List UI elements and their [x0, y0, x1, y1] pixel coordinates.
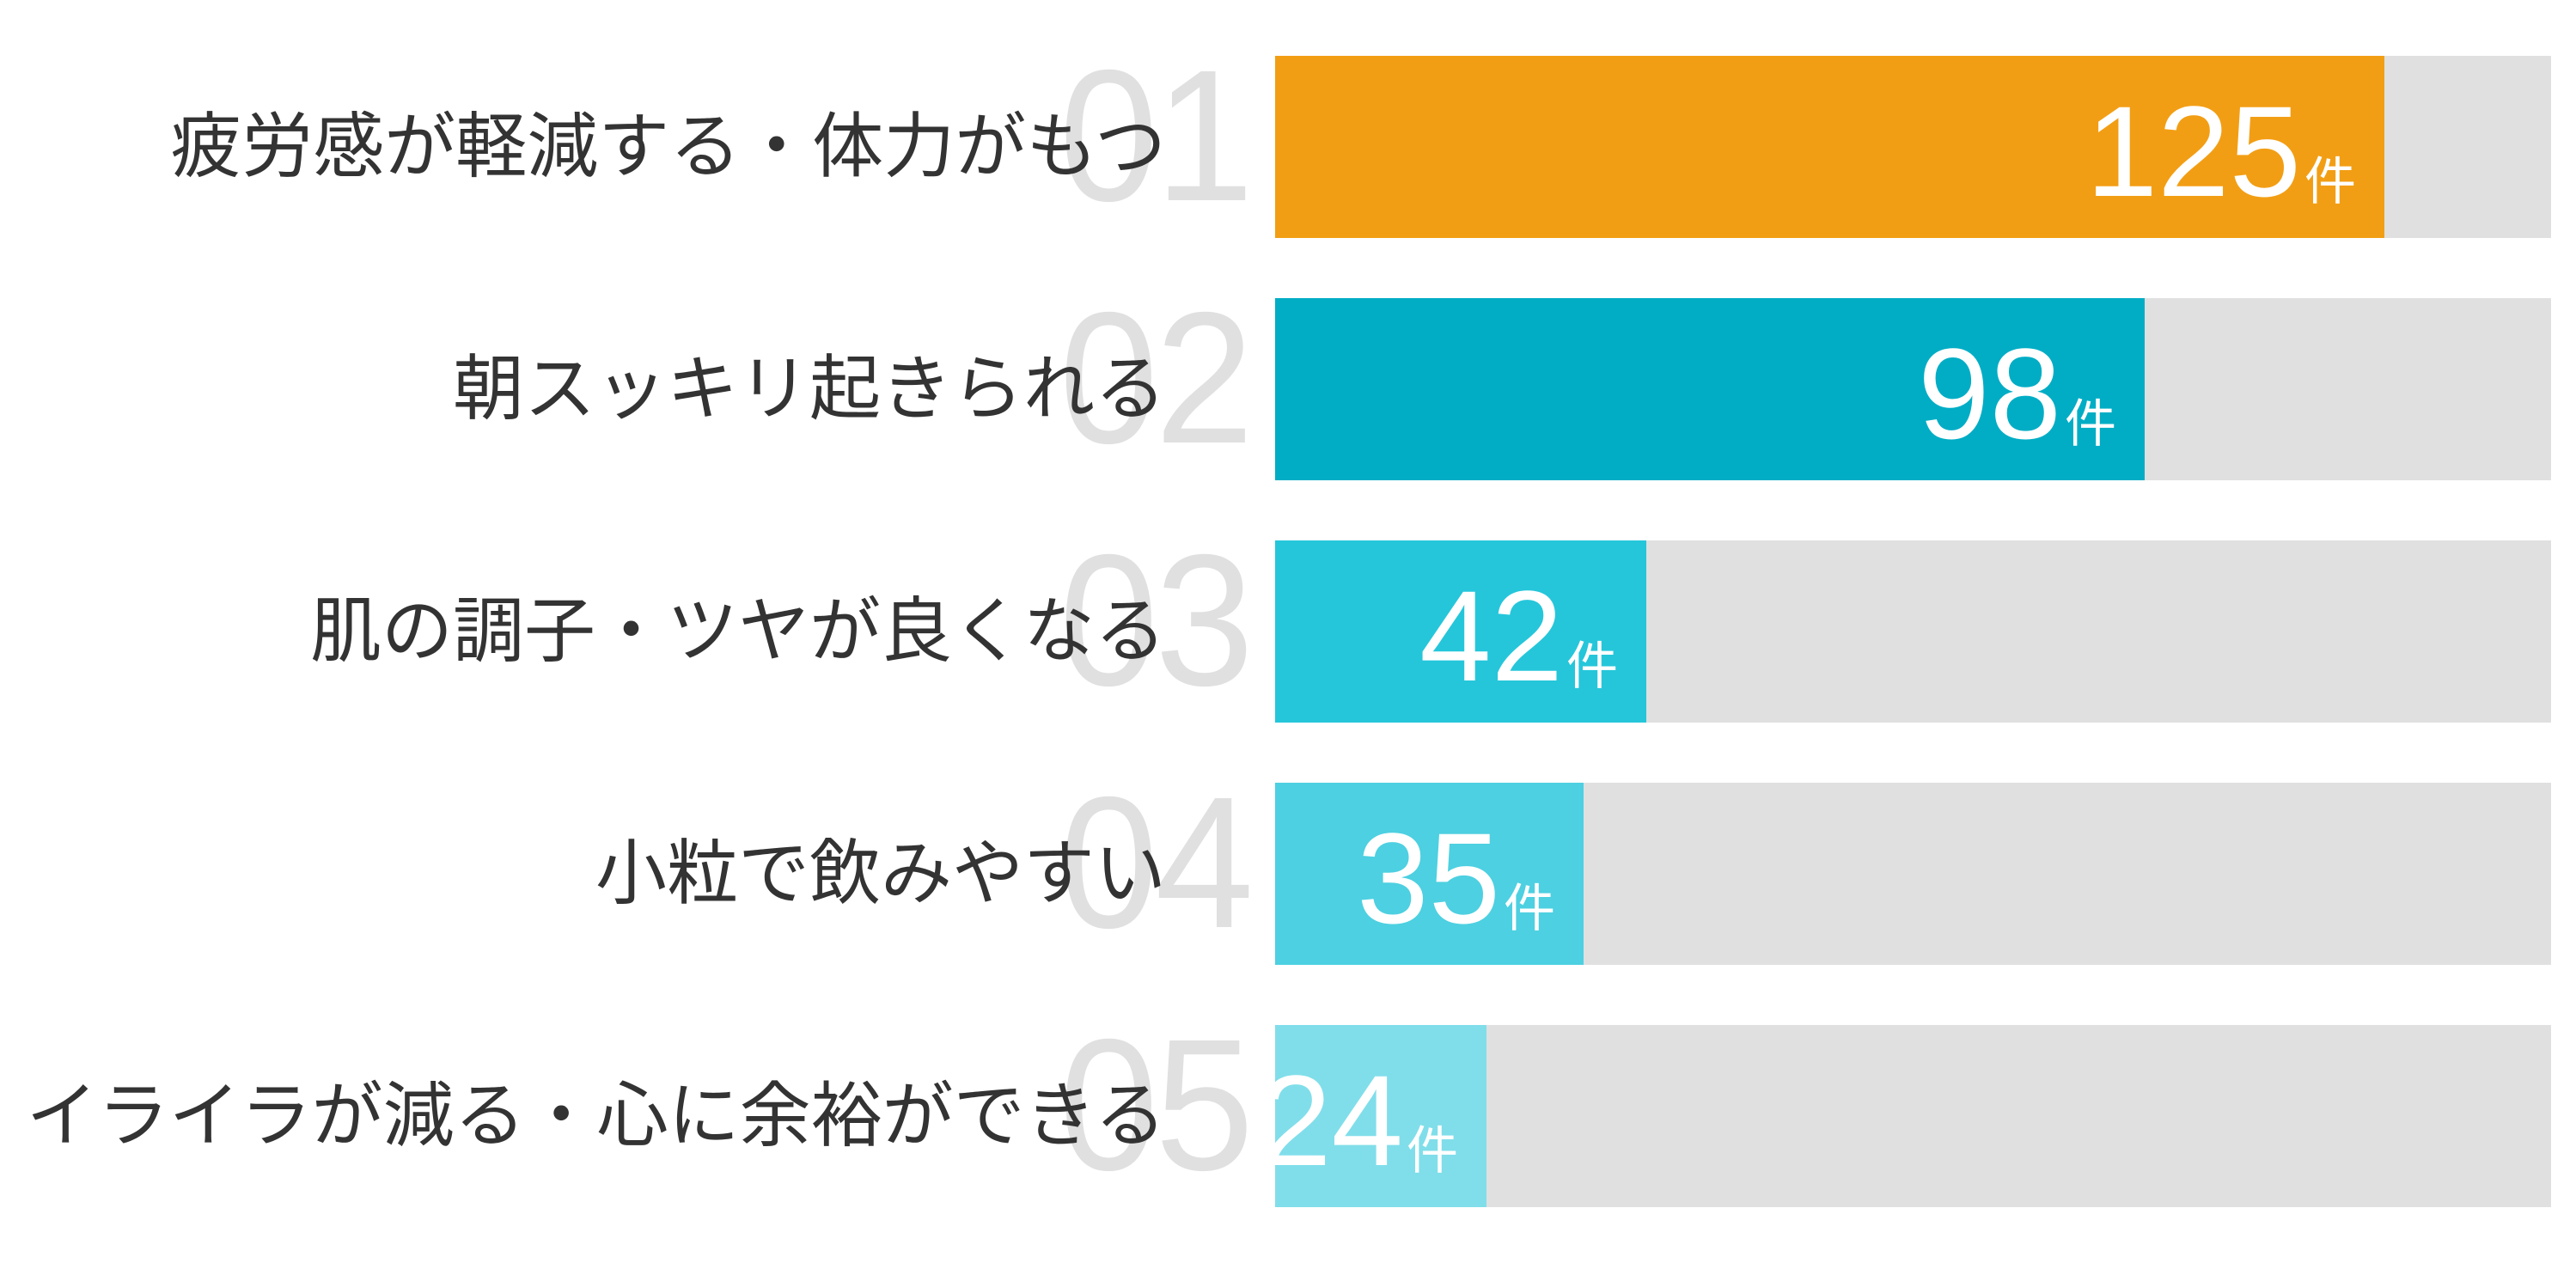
track 1 — [1275, 56, 2551, 238]
bar 2: 98 — [1918, 321, 2061, 466]
row 3 — [310, 516, 2551, 725]
bar 3: 件 — [1566, 638, 1618, 695]
bar 1: 件 — [2304, 153, 2356, 210]
bar 5: 件 — [1407, 1122, 1458, 1180]
rank number 03: 03 — [1059, 516, 1250, 725]
bar 2 — [1275, 298, 2145, 480]
row 4 — [595, 759, 2551, 967]
track 2 — [1275, 298, 2551, 480]
bar 4 — [1275, 783, 1584, 965]
row 2 — [453, 274, 2551, 483]
row 5 — [27, 1001, 2551, 1210]
track 5 — [1275, 1025, 2551, 1207]
label 3: 肌の調子・ツヤが良くなる — [310, 591, 1166, 671]
bar 1: 125 — [2086, 79, 2301, 223]
label 1: 疲労感が軽減する・体力がもつ — [170, 107, 1166, 186]
rank number 05: 05 — [1059, 1001, 1250, 1210]
rank number 04: 04 — [1059, 759, 1250, 967]
label 2: 朝スッキリ起きられる — [453, 349, 1166, 429]
row 1 — [170, 32, 2551, 241]
bar 2: 件 — [2065, 395, 2116, 453]
rank number 02: 02 — [1059, 274, 1250, 483]
bar 5 — [1275, 1025, 1486, 1207]
track 4 — [1275, 783, 2551, 965]
bar 4: 件 — [1504, 880, 1555, 937]
bar 1 — [1275, 56, 2384, 238]
label 4: 小粒で飲みやすい — [595, 833, 1166, 913]
rank number 01: 01 — [1059, 32, 1250, 241]
bar 3: 42 — [1419, 564, 1563, 708]
label 5: イライラが減る・心に余裕ができる — [27, 1076, 1166, 1156]
track 3 — [1275, 540, 2551, 723]
bar 3 — [1275, 540, 1646, 723]
bar 4: 35 — [1357, 806, 1500, 950]
